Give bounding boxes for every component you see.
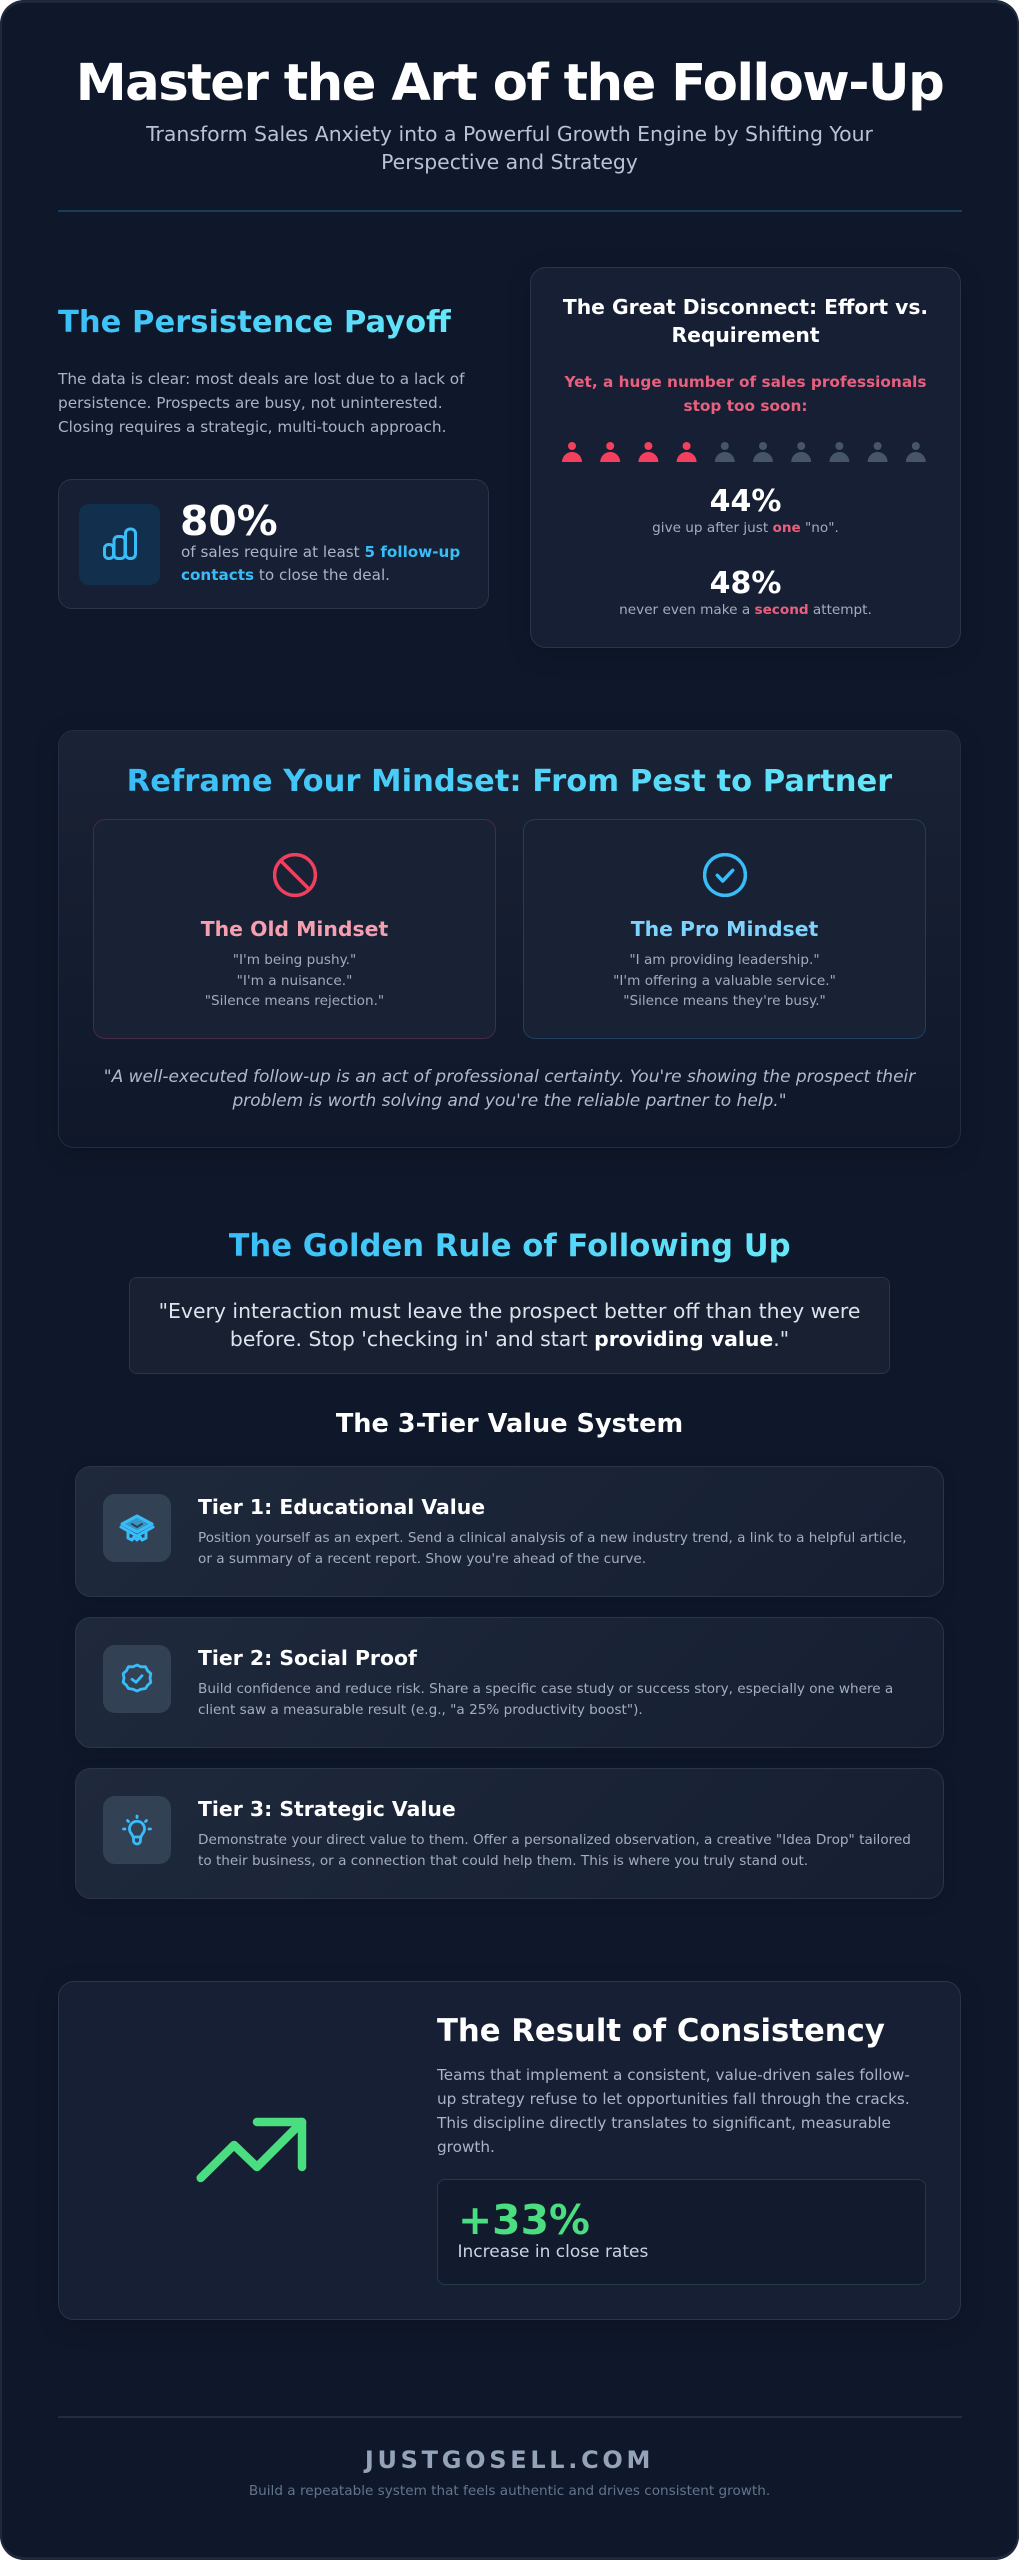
text: result explanation: growth.	[437, 2138, 495, 2156]
stat: 44%: 44%	[710, 484, 781, 519]
heading: great disconnect: Requirement	[671, 323, 820, 347]
stat label: Increase in close rates	[458, 2242, 648, 2262]
quote: professional certainty	[104, 1067, 916, 1111]
stat description	[181, 543, 460, 584]
icon: light bulb	[103, 1796, 171, 1864]
card: pro mindset	[523, 819, 926, 1039]
icon: check circle	[703, 853, 747, 897]
text: pro mindset quotes: "I am providing leadership."	[629, 952, 820, 968]
text: tier 1 description	[198, 1530, 907, 1566]
card: tier 3	[75, 1768, 944, 1899]
quote: professional certainty: problem is worth solving and you're the reliable partner to help."	[232, 1091, 787, 1111]
heading: tier 1: Tier 1: Educational Value	[198, 1495, 485, 1519]
text: old mindset quotes	[205, 952, 384, 1009]
subtitle: Transform Sales Anxiety into a Powerful Growth Engine by Shifting Your	[146, 122, 873, 146]
text: result explanation: Teams that implement a consistent, value-driven sales follow-	[437, 2066, 910, 2084]
stat: 80%: 80%	[180, 497, 278, 545]
heading: great disconnect	[562, 295, 928, 347]
text: tier 2 description: Build confidence and reduce risk. Share a specific case study or success story, especially one where a	[198, 1681, 893, 1697]
text: tier 2 description	[198, 1681, 893, 1718]
stat card: 80 percent	[58, 479, 489, 609]
icon: graduation cap	[103, 1494, 171, 1562]
icon: ban	[273, 853, 317, 897]
text: tier 1 description: or a summary of a recent report. Show you're ahead of the curve.	[198, 1550, 646, 1566]
text: stop too soon: Yet, a huge number of sales professionals	[564, 373, 926, 391]
text: persistence explanation: Closing requires a strategic, multi-touch approach.	[58, 418, 446, 436]
heading: result of consistency: The Result of Consistency	[437, 2014, 885, 2049]
stat label: 48%: never even make a second attempt.	[619, 602, 872, 618]
icon: bar chart	[79, 504, 160, 585]
stat description: of sales require at least 5 follow-up	[181, 543, 460, 561]
callout: golden rule quote	[129, 1277, 890, 1374]
panel: the great disconnect	[530, 267, 961, 648]
card: old mindset	[93, 819, 496, 1039]
text: old mindset quotes: "Silence means rejection."	[205, 993, 384, 1009]
text: tier 3 description: to their business, or a connection that could help them. This is where you truly stand out.	[198, 1852, 808, 1868]
text: golden rule quote: "Every interaction must leave the prospect better off than they were	[159, 1299, 860, 1323]
heading: pro mindset: The Pro Mindset	[631, 917, 818, 941]
text: persistence explanation: persistence. Prospects are busy, not uninterested.	[58, 394, 443, 412]
text: stop too soon	[564, 373, 926, 415]
text: tier 3 description: Demonstrate your direct value to them. Offer a personalized observation, a creative "Idea Drop" tailored	[198, 1832, 911, 1848]
text: persistence explanation	[58, 370, 465, 436]
subtitle: Perspective and Strategy	[381, 150, 638, 174]
stat: +33%: +33%	[458, 2196, 590, 2244]
heading: tier 3: Tier 3: Strategic Value	[198, 1797, 456, 1821]
stat card: +33%	[437, 2179, 926, 2285]
icon row: ten people, four highlighted	[562, 442, 926, 462]
heading: old mindset: The Old Mindset	[201, 917, 388, 941]
panel: reframe your mindset	[58, 730, 961, 1148]
text: tier 3 description	[198, 1832, 911, 1868]
text: pro mindset quotes	[613, 952, 836, 1009]
footer brand: JUSTGOSELL.COM	[365, 2446, 654, 2474]
heading: reframe your mindset: Reframe Your Mindset: From Pest to Partner	[127, 764, 892, 799]
text: old mindset quotes: "I'm a nuisance."	[237, 972, 352, 988]
text: stop too soon: stop too soon:	[684, 397, 808, 415]
text: tier 2 description: client saw a measurable result (e.g., "a 25% productivity boost").	[198, 1702, 643, 1718]
title: Master the Art of the Follow-Up	[76, 53, 943, 113]
icon: verified badge	[103, 1645, 171, 1713]
heading: tier 2: Tier 2: Social Proof	[198, 1646, 417, 1670]
panel: result of consistency	[58, 1981, 961, 2320]
text: result explanation	[436, 2066, 910, 2156]
text: old mindset quotes: "I'm being pushy."	[233, 952, 356, 968]
heading: persistence payoff: The Persistence Payoff	[58, 305, 451, 340]
text: pro mindset quotes: "Silence means they're busy."	[623, 993, 826, 1009]
text: pro mindset quotes: "I'm offering a valuable service."	[613, 972, 836, 988]
heading: golden rule: The Golden Rule of Following Up	[228, 1229, 791, 1264]
text: golden rule quote	[159, 1299, 860, 1351]
stat label: 44%: give up after just one "no".	[652, 520, 839, 536]
text: persistence explanation: The data is clear: most deals are lost due to a lack of	[58, 370, 465, 388]
text: result explanation: up strategy refuse to let opportunities fall through the cracks.	[437, 2090, 910, 2108]
text: tier 1 description: Position yourself as an expert. Send a clinical analysis of a new industry trend, a link to a helpful article,	[198, 1530, 907, 1546]
heading: 3-tier value system: The 3-Tier Value System	[336, 1409, 683, 1439]
icon: trending up arrow	[196, 2118, 306, 2182]
text: golden rule quote: before. Stop 'checking in' and start providing value."	[230, 1327, 789, 1351]
card: tier 2	[75, 1617, 944, 1748]
footer tagline: Build a repeatable system that feels authentic and drives consistent growth.	[249, 2483, 770, 2499]
panel: persistence payoff	[58, 305, 489, 609]
stat: 48%: 48%	[710, 566, 781, 601]
card: tier 1	[75, 1466, 944, 1597]
heading: great disconnect: The Great Disconnect: Effort vs.	[563, 295, 928, 319]
quote: professional certainty: "A well-executed follow-up is an act of professional certainty. You're showing the prospect their	[104, 1067, 915, 1087]
text: result explanation: This discipline directly translates to significant, measurable	[437, 2114, 891, 2132]
subtitle	[146, 122, 873, 174]
stat description: contacts to close the deal.	[181, 566, 390, 584]
